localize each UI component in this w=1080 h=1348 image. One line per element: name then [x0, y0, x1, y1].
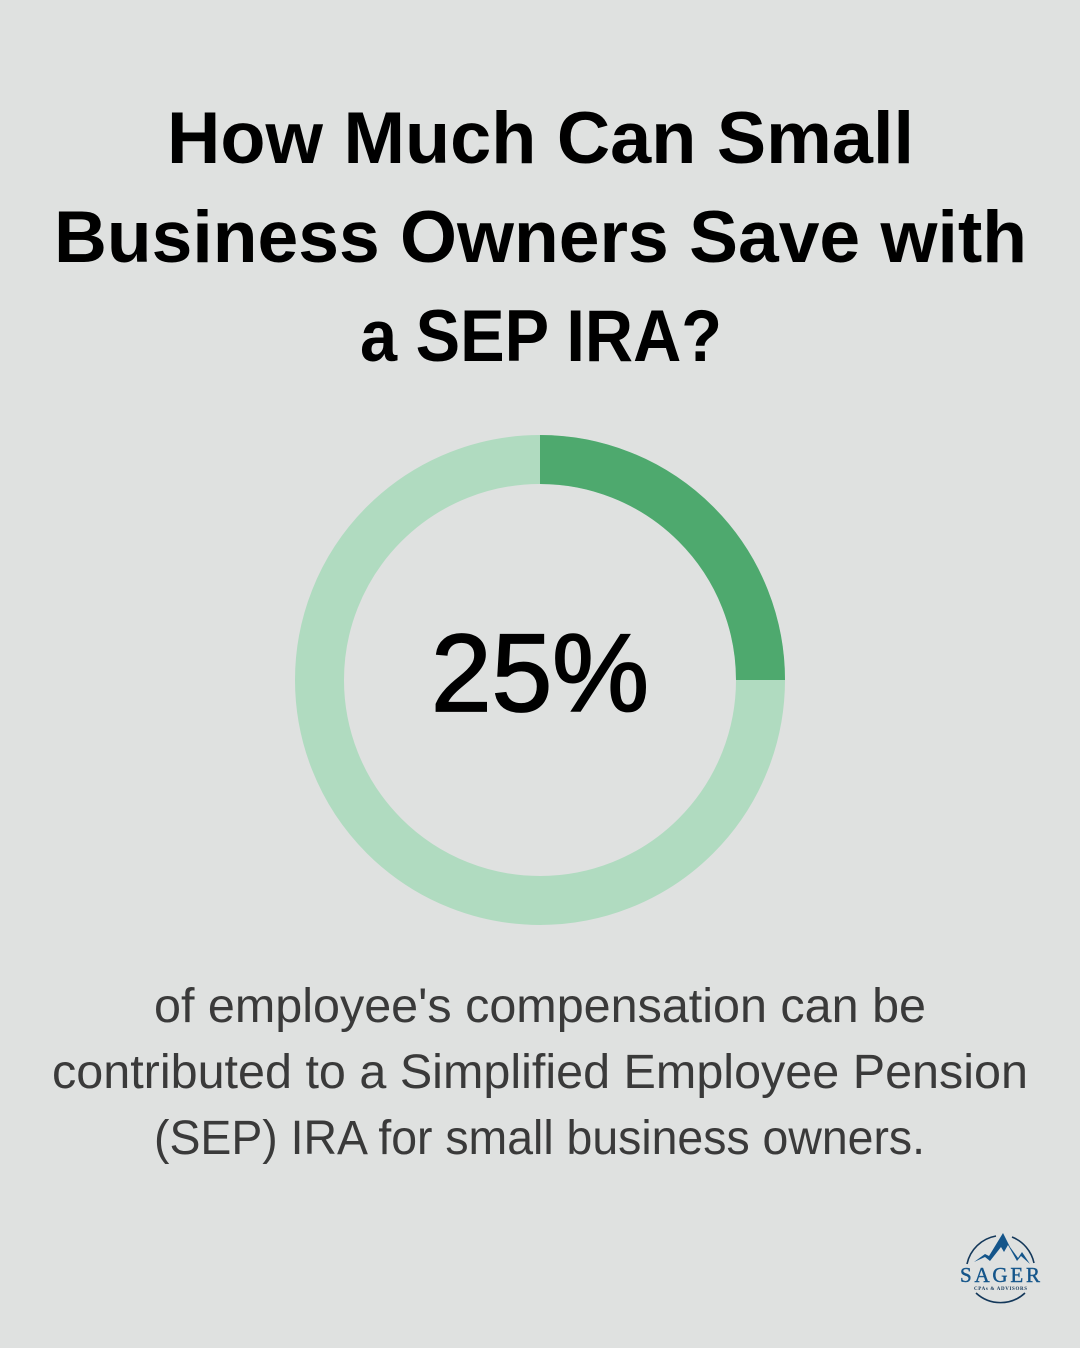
description: contributed to a Simplified Employee Pension [52, 1046, 1028, 1099]
title: a SEP IRA? [360, 296, 722, 377]
description [52, 980, 1028, 1165]
title: How Much Can Small [167, 98, 914, 179]
title [54, 98, 1027, 377]
title: Business Owners Save with [54, 197, 1027, 278]
description: (SEP) IRA for small business owners. [154, 1112, 925, 1165]
logo tagline: CPAs & ADVISORS [974, 1287, 1027, 1292]
description: of employee's compensation can be [154, 980, 926, 1033]
donut chart [320, 460, 760, 900]
logo mountains [974, 1233, 1030, 1264]
logo ring arcs [967, 1236, 1034, 1303]
logo: Sager CPAs & Advisors [960, 1233, 1040, 1303]
big number: 25%: 25% [431, 612, 649, 735]
logo wordmark: SAGER [960, 1263, 1040, 1287]
